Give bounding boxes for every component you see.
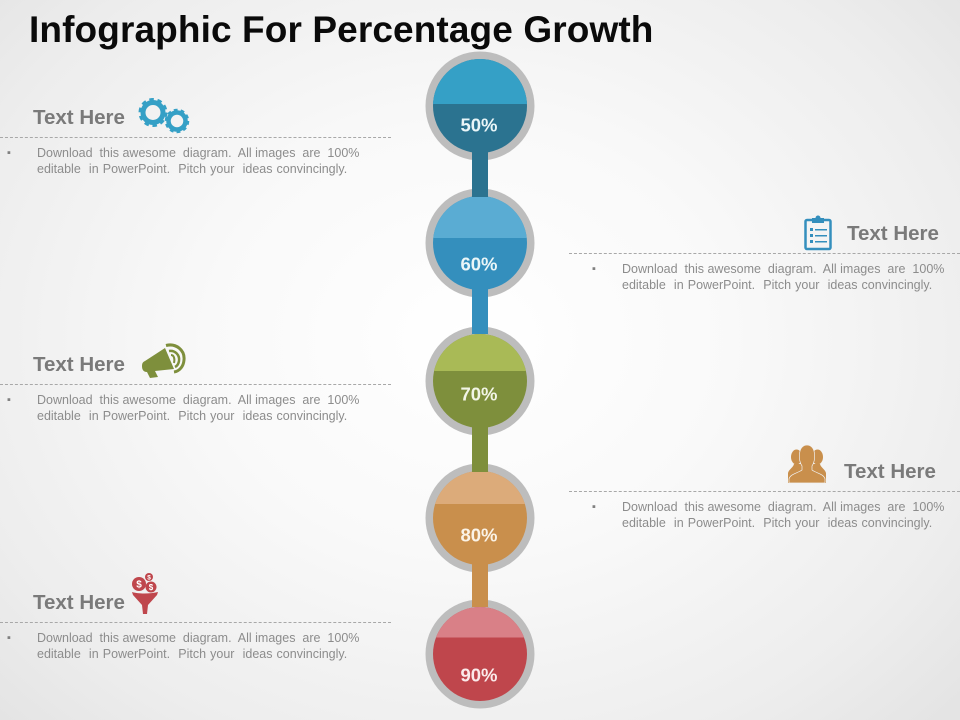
connector: 50 to 60 [472, 150, 488, 197]
panel: left block 2 [0, 353, 391, 423]
panel: right block 1 [569, 222, 960, 292]
panel: left block 3: ▪ [7, 632, 11, 644]
text block: Download this awesome diagram. All images are 100% [37, 631, 359, 645]
icon: funnel with coins: $ [147, 574, 151, 582]
text block: editable in PowerPoint. Pitch your ideas convincingly. [37, 409, 347, 423]
panel: right block 2: ▪ [592, 501, 596, 513]
panel: left block 1 [0, 106, 391, 176]
text block [7, 146, 359, 176]
heading: Text Here [847, 222, 939, 245]
text block: Download this awesome diagram. All images are 100% [622, 500, 944, 514]
icon: funnel with coins: $ [136, 580, 142, 590]
heading: Text Here [33, 353, 125, 376]
text block: editable in PowerPoint. Pitch your ideas convincingly. [37, 647, 347, 661]
circle: 60%: 60% [460, 254, 498, 274]
icon: megaphone [142, 343, 186, 378]
circle: 90% [426, 600, 534, 708]
icon: funnel with coins [132, 573, 158, 614]
circle: 90%: 90% [460, 664, 498, 686]
text block: Download this awesome diagram. All images are 100% [622, 262, 944, 276]
icon: clipboard [804, 216, 832, 250]
heading: Text Here [33, 106, 125, 129]
circle: 50% [426, 52, 534, 160]
chart: vertical percentage circles [426, 52, 534, 708]
connector: 60 to 70 [472, 287, 488, 334]
panel: left block 1: ▪ [7, 147, 11, 159]
text block: Download this awesome diagram. All images are 100% [37, 393, 359, 407]
icon: gears [138, 98, 190, 134]
circle: 70%: 70% [460, 384, 498, 404]
text block: editable in PowerPoint. Pitch your ideas convincingly. [622, 278, 932, 292]
connector: 80 to 90 [472, 562, 488, 607]
icon: funnel with coins: $ [149, 583, 154, 592]
text block: editable in PowerPoint. Pitch your ideas convincingly. [37, 162, 347, 176]
panel: right block 2 [569, 460, 960, 530]
circle: 50%: 50% [460, 114, 498, 136]
icon: people group [788, 445, 826, 483]
panel: right block 1: ▪ [592, 263, 596, 275]
circle: 80% [426, 464, 534, 572]
text block [592, 262, 944, 292]
text block: editable in PowerPoint. Pitch your ideas convincingly. [622, 516, 932, 530]
panel: left block 3 [0, 591, 391, 661]
circle: 70% [426, 326, 534, 436]
text block [7, 393, 359, 423]
heading: Text Here [33, 591, 125, 614]
text block [7, 631, 359, 661]
connector: 70 to 80 [472, 425, 488, 472]
panel: left block 2: ▪ [7, 394, 11, 406]
title: Infographic For Percentage Growth [29, 9, 653, 50]
heading: Text Here [844, 460, 936, 483]
text block: Download this awesome diagram. All images are 100% [37, 146, 359, 160]
circle: 80%: 80% [460, 524, 498, 546]
circle: 60% [426, 188, 534, 298]
text block [592, 500, 944, 530]
